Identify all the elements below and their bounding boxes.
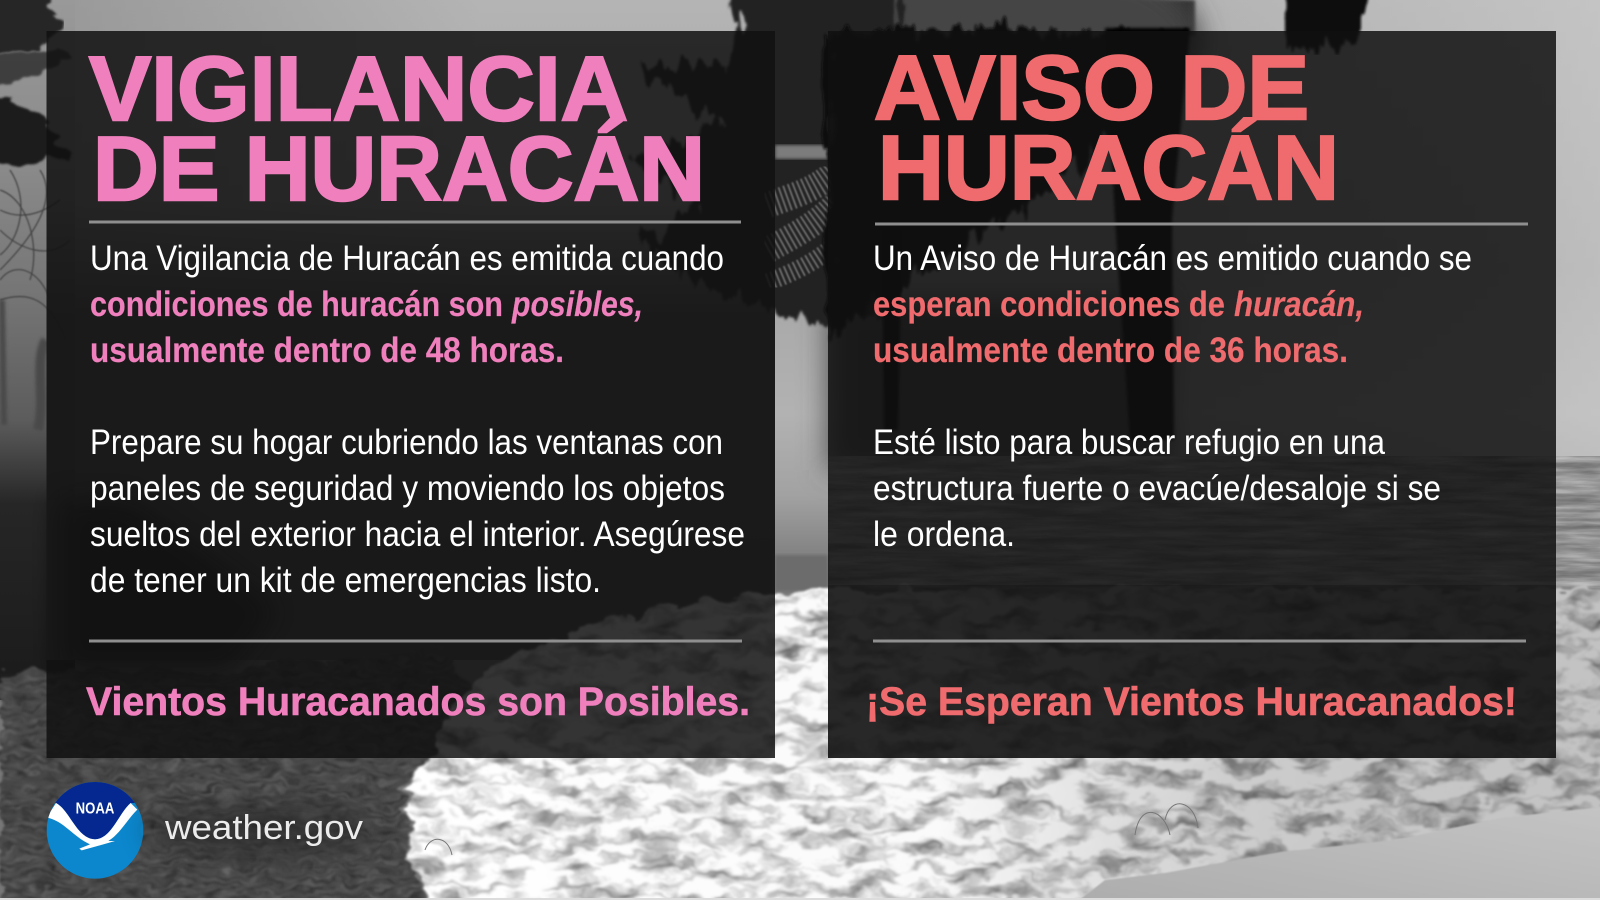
- description: Una Vigilancia de Huracán es emitida cuando: [90, 239, 724, 278]
- preparation advice: sueltos del exterior hacia el interior. Asegúrese: [90, 515, 745, 554]
- central palm crown: [630, 0, 960, 320]
- foam dimming behind right panel: [828, 585, 1556, 758]
- description: posibles,: [511, 285, 643, 324]
- panel background: [828, 31, 1556, 758]
- icon: NOAA logo: NOAA: [76, 800, 115, 817]
- bottom strip: [0, 898, 1600, 900]
- description: Un Aviso de Huracán es emitido cuando se: [873, 239, 1472, 278]
- top-left palm: [0, 0, 60, 58]
- left tree branches: [0, 170, 70, 340]
- heading: VIGILANCIA: [89, 39, 628, 140]
- shelter advice: [873, 423, 1441, 554]
- top dome behind center palm: [880, 0, 1195, 36]
- dark bushes lower left: [60, 500, 280, 672]
- top black frond: [1282, 0, 1375, 48]
- panel background: [46, 31, 775, 758]
- seaweed: [425, 804, 1198, 855]
- shelter advice: Esté listo para buscar refugio en una: [873, 423, 1385, 462]
- description: esperan condiciones de: [873, 285, 1225, 324]
- distant sea: [828, 456, 1600, 616]
- description: [90, 239, 724, 370]
- description: condiciones de huracán son: [90, 285, 503, 324]
- wet sand: [1073, 806, 1600, 900]
- sand: [0, 660, 460, 898]
- heading divider: [89, 220, 741, 224]
- preparation advice: paneles de seguridad y moviendo los objetos: [90, 469, 725, 508]
- icon: NOAA logo: [46, 782, 144, 879]
- description: usualmente dentro de 36 horas.: [873, 331, 1348, 370]
- right palm canopy: [828, 31, 1190, 335]
- bottom divider: [89, 640, 742, 642]
- tagline: Vientos Huracanados son Posibles.: [86, 680, 750, 724]
- heading: AVISO DE: [874, 38, 1309, 139]
- description: usualmente dentro de 48 horas.: [90, 331, 564, 370]
- left fog column: [0, 0, 75, 700]
- preparation advice: de tener un kit de emergencias listo.: [90, 561, 601, 600]
- heading: [874, 38, 1339, 219]
- heading: HURACÁN: [878, 118, 1339, 219]
- main palm trunk: [1105, 28, 1190, 440]
- darkness behind left panel: [46, 200, 775, 660]
- preparation advice: Prepare su hogar cubriendo las ventanas con: [90, 423, 723, 462]
- foam: [380, 585, 1600, 900]
- preparation advice: [90, 423, 745, 600]
- bottom divider: [873, 640, 1526, 642]
- pale strip behind fronds: [775, 145, 828, 159]
- darkness behind right trunks: [828, 300, 1168, 470]
- description: [873, 239, 1472, 370]
- shelter advice: le ordena.: [873, 515, 1015, 554]
- tagline: ¡Se Esperan Vientos Huracanados!: [866, 680, 1517, 724]
- heading: [89, 39, 705, 220]
- dark mass behind panel top: [800, 0, 1200, 130]
- website label: weather.gov: [164, 809, 363, 847]
- shelter advice: estructura fuerte o evacúe/desaloje si se: [873, 469, 1441, 508]
- horizon band: [775, 555, 828, 591]
- panel: vigilancia de huracán: [46, 31, 775, 758]
- description: huracán,: [1234, 285, 1364, 324]
- light palm leaflets: [768, 172, 835, 282]
- heading divider: [875, 222, 1528, 226]
- thin palm trunk: [882, 230, 902, 430]
- fog trunks on left: [2, 300, 46, 430]
- panel: aviso de huracán: [828, 31, 1556, 758]
- heading: DE HURACÁN: [93, 119, 705, 220]
- website halo: [147, 806, 377, 854]
- dark frond dome at left: [0, 95, 70, 165]
